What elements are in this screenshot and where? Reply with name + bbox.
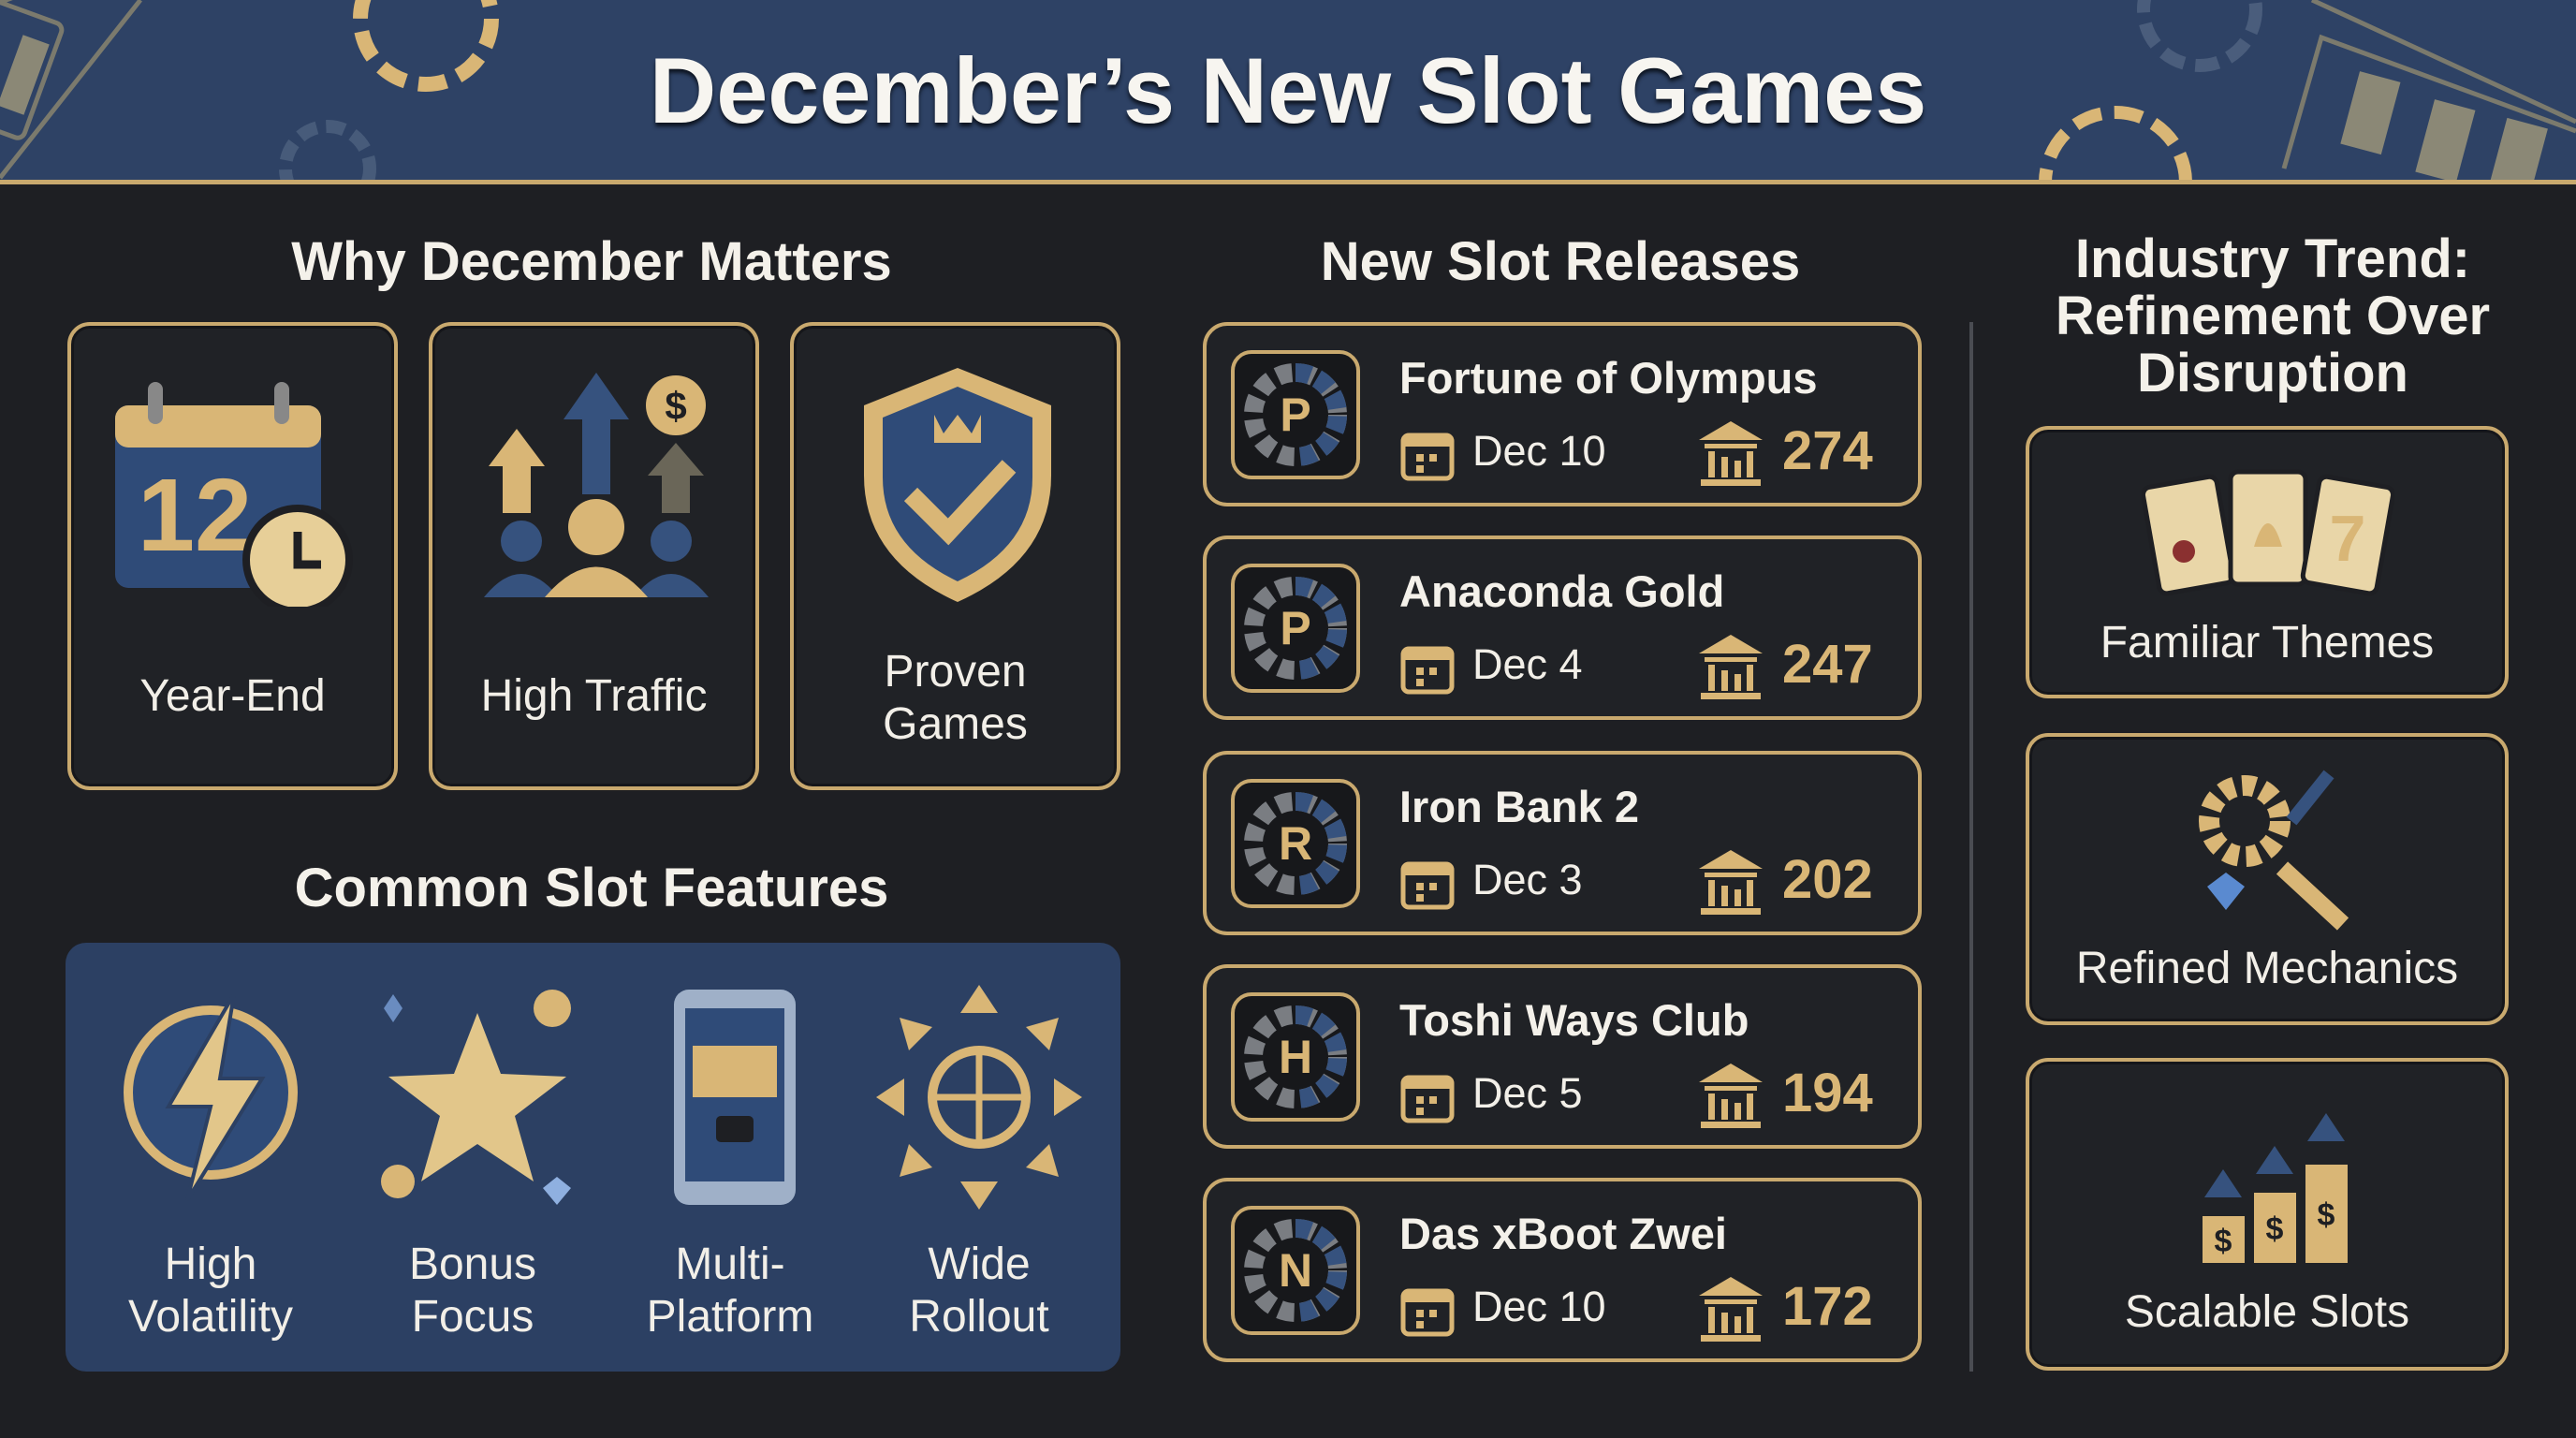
panel: high traffic <box>429 322 759 790</box>
icon: provider R <box>1231 779 1360 908</box>
release: das xboot zwei <box>1203 1178 1922 1362</box>
feature: bonus focus <box>381 990 571 1342</box>
release: fortune of olympus <box>1203 322 1922 506</box>
feature: high volatility: High <box>165 1240 256 1289</box>
icon: slot cards: 7 <box>2330 502 2365 575</box>
release: toshi ways club: 194 <box>1782 1063 1873 1123</box>
panel: features <box>66 943 1120 1372</box>
feature: multi-platform: Platform <box>647 1292 813 1342</box>
icon: provider H <box>1231 992 1360 1122</box>
icon: provider N <box>1231 1206 1360 1335</box>
gold header line <box>0 180 2576 184</box>
icon: people arrows: $ <box>665 384 687 428</box>
release: das xboot zwei: Das xBoot Zwei <box>1399 1209 1727 1258</box>
release: anaconda gold: 247 <box>1782 634 1873 695</box>
release: das xboot zwei: 172 <box>1782 1276 1873 1337</box>
icon: provider P <box>1231 564 1360 693</box>
header band <box>0 0 2576 183</box>
release: toshi ways club: Dec 5 <box>1472 1069 1583 1117</box>
feature: wide rollout <box>876 985 1082 1342</box>
release: fortune of olympus: 274 <box>1782 420 1873 481</box>
icon: money stacks: $ <box>2318 1197 2335 1233</box>
feature: bonus focus: Bonus <box>409 1240 536 1289</box>
feature: multi-platform: Multi- <box>675 1240 785 1289</box>
panel: year-end <box>67 322 398 790</box>
heading: why december matters: Why December Matters <box>291 231 892 292</box>
icon: calendar clock: 12 <box>138 458 252 573</box>
icon: provider H: H <box>1279 1031 1312 1083</box>
panel: proven games: Games <box>883 699 1028 749</box>
icon: money stacks: $ <box>2215 1224 2232 1259</box>
heading: industry trend: Refinement Over <box>2056 286 2490 346</box>
release: iron bank 2: Iron Bank 2 <box>1399 782 1639 831</box>
panel: proven games: Proven <box>884 647 1027 697</box>
heading: industry trend: Industry Trend: <box>2075 228 2470 289</box>
title: December’s New Slot Games <box>650 38 1926 142</box>
release: anaconda gold <box>1203 536 1922 720</box>
heading: industry trend <box>2056 228 2490 404</box>
feature: wide rollout: Rollout <box>909 1292 1049 1342</box>
icon: provider R: R <box>1279 817 1312 870</box>
panel: scalable slots: Scalable Slots <box>2125 1287 2409 1337</box>
icon: provider N: N <box>1279 1244 1312 1297</box>
release: fortune of olympus: Dec 10 <box>1472 427 1606 475</box>
release: fortune of olympus: Fortune of Olympus <box>1399 353 1818 403</box>
heading: new slot releases: New Slot Releases <box>1321 231 1800 292</box>
icon: people arrows <box>484 373 709 597</box>
icon: money stacks: $ <box>2266 1211 2284 1247</box>
panel: proven games <box>790 322 1120 790</box>
panel: year-end: Year-End <box>139 671 326 721</box>
release: toshi ways club: Toshi Ways Club <box>1399 995 1749 1045</box>
release: anaconda gold: Anaconda Gold <box>1399 566 1724 616</box>
release: iron bank 2: Dec 3 <box>1472 856 1583 903</box>
feature: bonus focus: Focus <box>412 1292 534 1342</box>
panel: familiar themes <box>2026 426 2509 698</box>
release: toshi ways club <box>1203 964 1922 1149</box>
feature: multi-platform <box>647 990 813 1342</box>
icon: slot cards <box>2145 474 2391 592</box>
icon: money stacks <box>2203 1113 2348 1263</box>
panel: familiar themes: Familiar Themes <box>2100 618 2434 668</box>
release: iron bank 2 <box>1203 751 1922 935</box>
panel: scalable slots <box>2026 1058 2509 1371</box>
panel: refined mechanics: Refined Mechanics <box>2076 944 2458 993</box>
feature: high volatility: Volatility <box>128 1292 293 1342</box>
release: das xboot zwei: Dec 10 <box>1472 1283 1606 1330</box>
heading: common slot features: Common Slot Features <box>295 858 888 918</box>
icon: shield check <box>864 368 1051 602</box>
icon: provider P: P <box>1280 602 1311 654</box>
icon: calendar clock <box>115 382 345 607</box>
heading: industry trend: Disruption <box>2137 343 2408 404</box>
icon: gear wrench <box>2199 770 2349 931</box>
icon: provider P: P <box>1280 389 1311 441</box>
feature: high volatility <box>124 1004 298 1342</box>
panel: high traffic: High Traffic <box>481 671 707 721</box>
release: anaconda gold: Dec 4 <box>1472 640 1583 688</box>
icon: provider P <box>1231 350 1360 479</box>
feature: wide rollout: Wide <box>928 1240 1031 1289</box>
panel: refined mechanics <box>2026 733 2509 1025</box>
release: iron bank 2: 202 <box>1782 849 1873 910</box>
